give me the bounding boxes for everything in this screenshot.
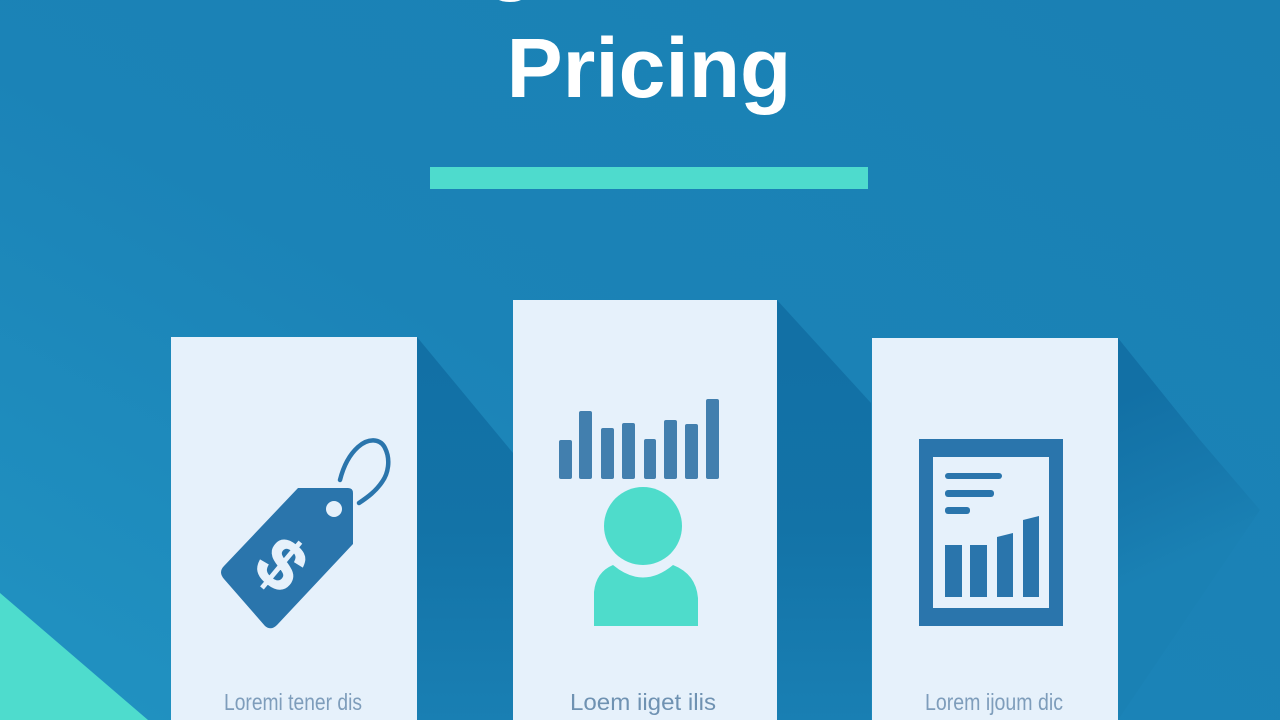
card long shadow	[417, 337, 513, 720]
icon: person	[594, 487, 698, 626]
card caption: Loremi tener dis	[224, 689, 362, 715]
icon: bar chart	[559, 399, 719, 479]
card background	[513, 300, 777, 720]
icon: price tag: $	[240, 521, 322, 609]
corner triangle accent	[0, 593, 148, 720]
title underline	[430, 167, 868, 189]
panel: report card	[872, 338, 1260, 720]
icon: price tag	[221, 440, 388, 628]
card long shadow	[777, 300, 871, 720]
card caption: Lorem ijoum dic	[925, 689, 1063, 715]
icon: report document	[919, 439, 1063, 626]
card background	[872, 338, 1118, 720]
title: Pricing	[507, 21, 791, 115]
panel: customer analytics card	[513, 300, 871, 720]
card caption: Loem iiget ilis	[570, 689, 716, 715]
card long shadow	[1118, 338, 1260, 720]
card background	[171, 337, 417, 720]
panel: price tag card	[171, 337, 513, 720]
